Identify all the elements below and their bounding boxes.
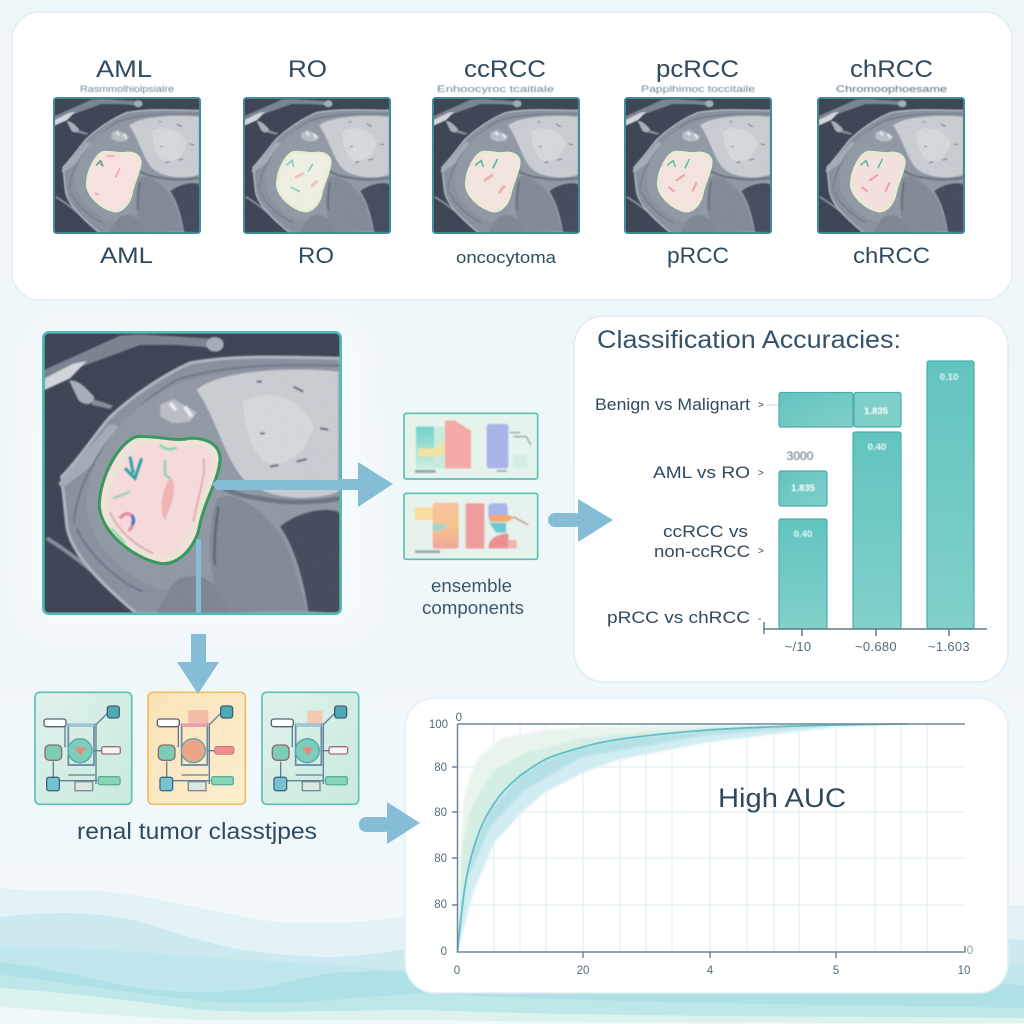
panel: ROC curve xyxy=(405,698,1008,993)
soft glow behind main workflow xyxy=(28,320,368,630)
grid xyxy=(458,724,965,952)
caption: ensemble components: ensemble xyxy=(431,576,512,596)
arrow: ensemble to accuracies xyxy=(548,499,613,542)
axis tick labels: ~/10 xyxy=(785,639,811,654)
column: chRCC: chRCC xyxy=(850,56,933,83)
category markers: - xyxy=(758,614,761,625)
x-axis labels: 0 xyxy=(967,945,973,957)
category markers: > xyxy=(758,546,764,557)
category labels: pRCC vs chRCC xyxy=(607,608,750,627)
y-axis labels: 0 xyxy=(441,946,447,958)
tumor class card 1 xyxy=(35,692,132,804)
axes xyxy=(452,724,965,958)
panel: tumor subtype thumbnails xyxy=(12,12,1012,300)
axes xyxy=(764,622,987,636)
caption: ensemble components: components xyxy=(422,598,524,618)
category markers xyxy=(758,400,779,625)
category labels: non-ccRCC xyxy=(654,542,750,561)
arrow: tumor classes to ROC curve xyxy=(359,802,420,844)
category labels: Benign vs Malignart xyxy=(595,395,750,414)
x-axis labels: 20 xyxy=(577,965,589,977)
bar value labels: 3000 xyxy=(787,449,814,463)
arrow: scan to tumor class cards xyxy=(177,539,219,694)
heading: Classification Accuracies: xyxy=(597,326,901,354)
main MRI scan with segmented tumor xyxy=(43,332,341,614)
x-axis labels: 0 xyxy=(454,965,460,977)
column: chRCC: chRCC xyxy=(853,243,930,268)
y-axis labels: 100 xyxy=(429,719,448,731)
bar value labels: 0.40 xyxy=(794,529,812,540)
bars xyxy=(779,361,974,629)
y-axis labels: 80 xyxy=(434,853,447,865)
ensemble component card 2 xyxy=(404,493,538,559)
annotation: High AUC: High AUC xyxy=(718,783,846,813)
axis tick labels: ~0.680 xyxy=(855,639,897,654)
category markers: > xyxy=(758,468,764,479)
y-axis labels: 80 xyxy=(434,762,447,774)
category labels xyxy=(595,395,750,627)
caption: ensemble components xyxy=(422,576,524,618)
confidence bands xyxy=(458,724,907,952)
column: ccRCC: oncocytoma xyxy=(456,248,557,267)
axis tick labels xyxy=(785,639,970,654)
column: AML xyxy=(54,56,200,268)
column: AML: AML xyxy=(100,243,153,268)
category labels: AML vs RO xyxy=(653,463,750,482)
column: AML: Rasmmolhiolpsialre xyxy=(80,84,174,94)
x-axis labels: 4 xyxy=(707,965,714,977)
column: ccRCC: ccRCC xyxy=(464,56,546,83)
y-axis labels: 0 xyxy=(456,712,462,724)
mean ROC curve xyxy=(458,724,908,952)
tumor class card 2, highlighted xyxy=(148,692,245,804)
bottom wave decoration xyxy=(0,888,1024,1024)
tumor class card 3 xyxy=(262,692,359,804)
bar value labels: 0.10 xyxy=(940,372,958,383)
bar value labels: 0.40 xyxy=(868,442,886,453)
column: pRCC: Papplhimoc toccitaile xyxy=(641,84,755,94)
y-axis labels: 80 xyxy=(434,807,447,819)
column: RO: RO xyxy=(298,243,334,268)
x-axis labels xyxy=(454,945,973,977)
bar value labels: 1.835 xyxy=(864,406,889,417)
caption: renal tumor class types: renal tumor classtjpes xyxy=(77,818,317,844)
column: chRCC: Chromoophoesame xyxy=(836,84,947,94)
column: AML: AML xyxy=(96,56,152,83)
x-axis labels: 5 xyxy=(833,965,839,977)
column: pRCC xyxy=(625,56,771,268)
column: RO: RO xyxy=(288,56,327,83)
bar value labels xyxy=(787,372,958,540)
column: ccRCC: Enhoocyroc tcaitiale xyxy=(437,84,554,94)
arrow: scan to ensemble components xyxy=(212,462,393,507)
axis tick labels: ~1.603 xyxy=(928,639,970,654)
column: RO xyxy=(244,56,390,268)
y-axis labels: 80 xyxy=(434,899,447,911)
bar value labels: 1.835 xyxy=(791,483,816,494)
column: ccRCC xyxy=(433,56,579,267)
category labels: ccRCC vs xyxy=(663,522,748,541)
column: chRCC xyxy=(818,56,964,268)
category markers: > xyxy=(758,400,764,411)
ensemble component card 1 xyxy=(404,413,538,479)
y-axis labels xyxy=(429,712,462,958)
panel: classification accuracies xyxy=(574,316,1008,682)
x-axis labels: 10 xyxy=(958,965,970,977)
column: pRCC: pRCC xyxy=(667,243,729,268)
column: pRCC: pcRCC xyxy=(656,56,739,83)
